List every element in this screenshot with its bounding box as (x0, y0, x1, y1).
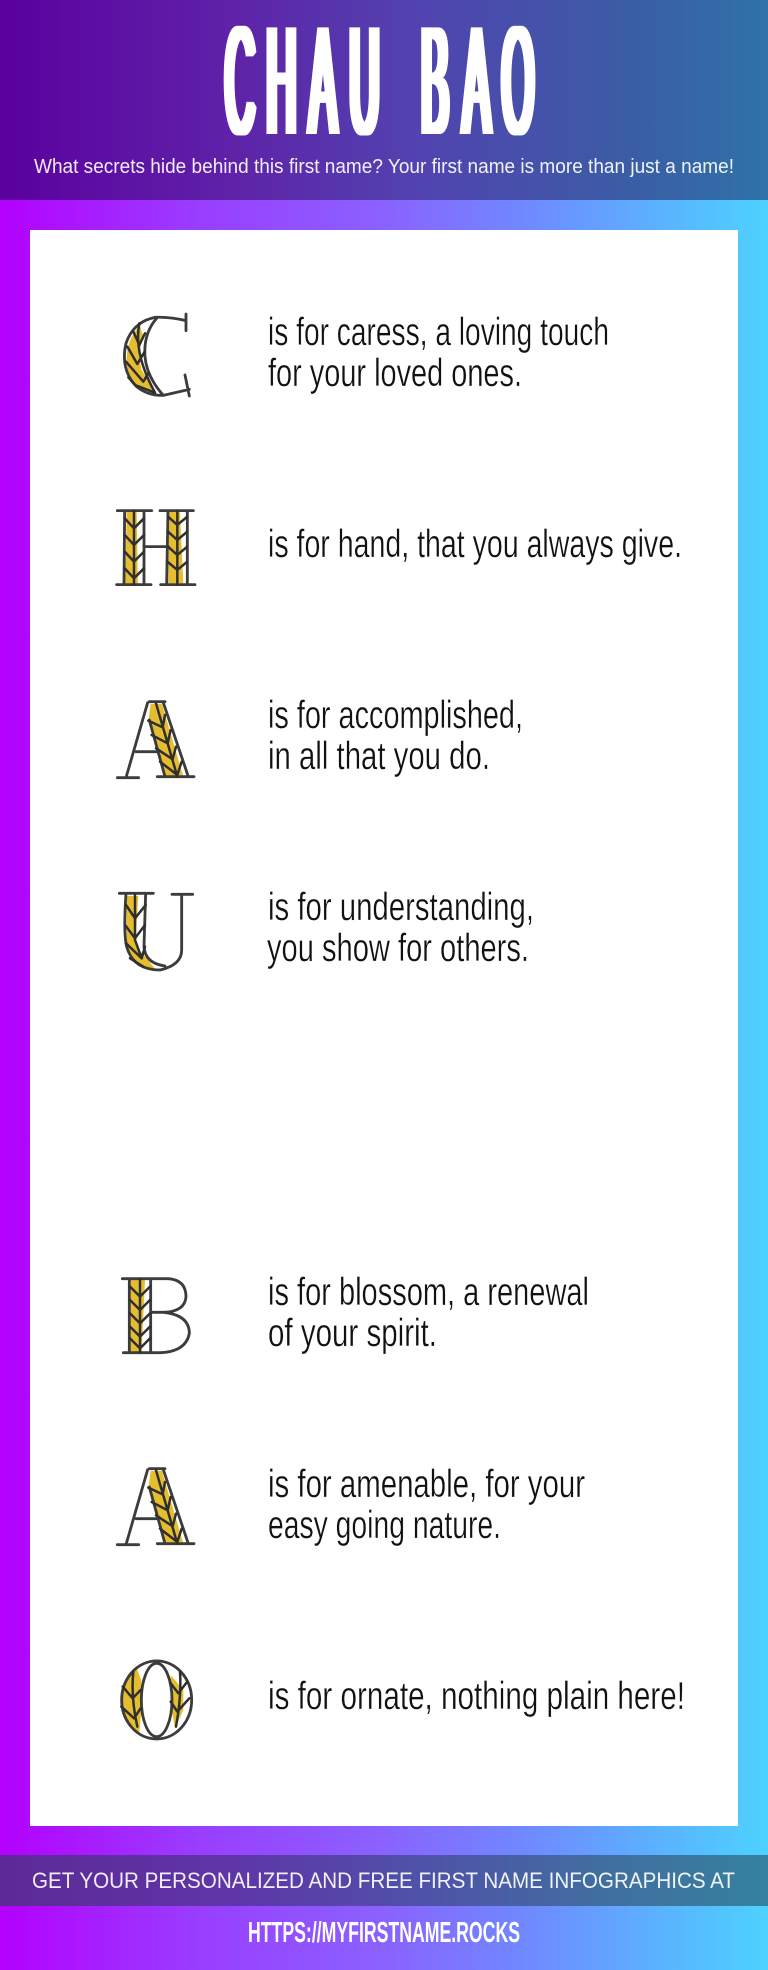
icon: letter C (124, 314, 189, 396)
icon: letter A (117, 1469, 194, 1545)
text: B (268, 1271, 589, 1355)
text: A: in all that you do. (268, 735, 490, 778)
subtitle: What secrets hide behind this first name? Your first name is more than just a name! (34, 156, 734, 178)
text: C: is for caress, a loving touch (268, 311, 609, 354)
text: A: easy going nature. (268, 1504, 501, 1547)
icon: letter A (117, 702, 194, 778)
row: O (121, 1661, 685, 1739)
text: A: is for accomplished, (268, 694, 523, 737)
text: B: is for blossom, a renewal (268, 1271, 589, 1314)
title (225, 0, 534, 168)
text: U (267, 886, 534, 970)
footer band (0, 1855, 768, 1906)
row: U (119, 886, 534, 970)
text: A: is for amenable, for your (268, 1463, 585, 1506)
header band (0, 0, 768, 200)
row: A (second) (117, 1463, 585, 1547)
text: B: of your spirit. (268, 1312, 437, 1355)
icon: letter B (122, 1279, 189, 1353)
text: U: is for understanding, (268, 886, 534, 929)
row: B (122, 1271, 589, 1355)
row: H (117, 511, 682, 585)
row: C (124, 311, 609, 396)
icon: letter O (121, 1661, 192, 1739)
white panel (30, 230, 738, 1826)
row: A (117, 694, 523, 778)
footer text: GET YOUR PERSONALIZED AND FREE FIRST NAME INFOGRAPHICS AT (32, 1868, 735, 1893)
text: U: you show for others. (267, 927, 529, 970)
text: A (268, 694, 523, 778)
icon: letter H (117, 511, 195, 585)
text: C (268, 311, 609, 395)
text: A (268, 1463, 585, 1547)
icon: letter U (119, 893, 193, 970)
text: C: for your loved ones. (268, 352, 522, 395)
footer url: HTTPS://MYFIRSTNAME.ROCKS (248, 1917, 520, 1949)
